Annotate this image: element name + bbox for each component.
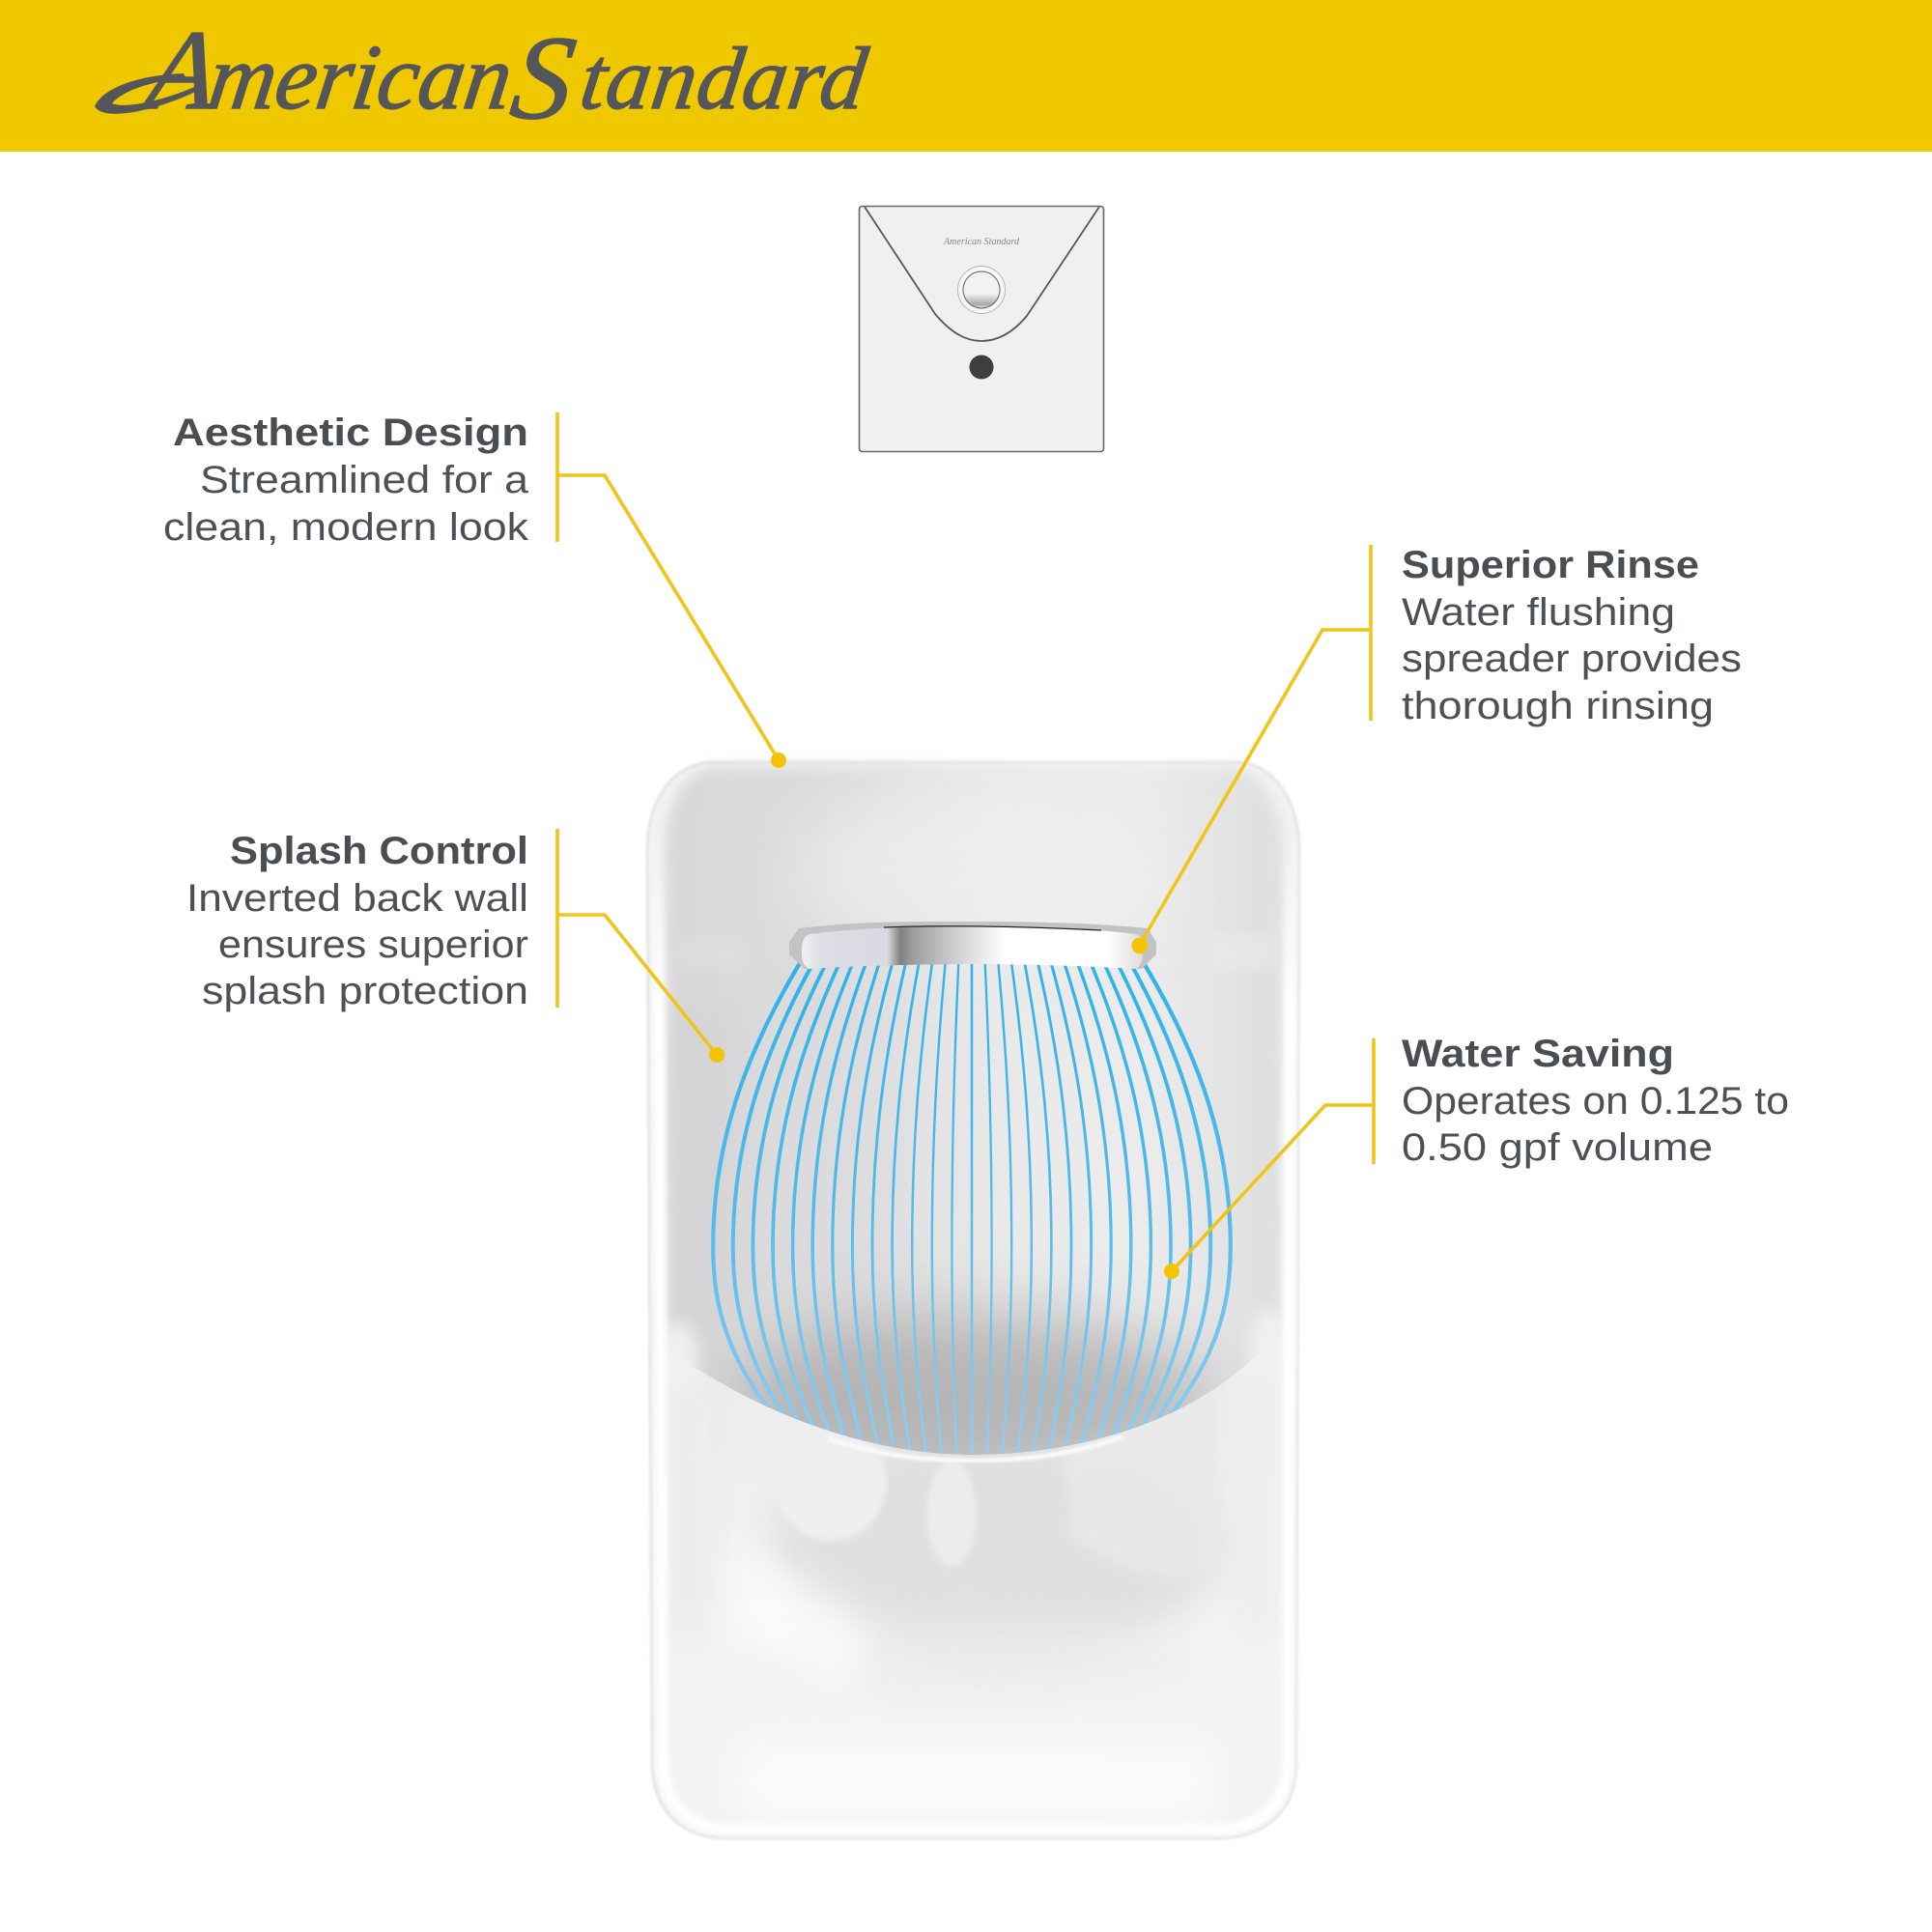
description (1402, 1080, 1789, 1169)
logo: American Standard: S (504, 12, 582, 144)
leader line (557, 412, 786, 768)
urinal body (647, 762, 1299, 1838)
callout: Aesthetic Design (163, 412, 786, 768)
lip highlight (831, 1437, 1121, 1461)
soft lower wall corners (659, 1310, 1289, 1392)
leader line (1164, 1038, 1374, 1279)
panel plate (860, 207, 1103, 452)
callout: Superior Rinse (1132, 544, 1742, 954)
description: splash protection (202, 970, 528, 1012)
flush button (958, 267, 1005, 313)
description: Operates on 0.125 to (1402, 1080, 1789, 1122)
description: 0.50 gpf volume (1402, 1126, 1713, 1169)
description: spreader provides (1402, 638, 1742, 680)
rim highlight (658, 831, 1291, 1830)
description: ensures superior (218, 923, 528, 966)
description (186, 877, 528, 1012)
heading: Superior Rinse (1402, 544, 1699, 586)
heading: Aesthetic Design (173, 412, 528, 454)
logo: American Standard: A (132, 7, 227, 133)
chrome spreader (789, 922, 1156, 969)
panel logo text: American Standard (943, 236, 1019, 247)
description: Water flushing (1402, 591, 1675, 634)
V-shaped cover seam (865, 207, 1099, 341)
sensor dot (970, 355, 993, 379)
lower bowl (668, 1360, 1280, 1656)
leader line (557, 829, 724, 1063)
callout: Water Saving (1164, 1033, 1789, 1279)
callout: Splash Control (186, 829, 724, 1063)
description: Streamlined for a (200, 459, 529, 501)
header band (0, 0, 1932, 152)
leader line (1132, 545, 1371, 954)
spreader water lines (713, 961, 1231, 1478)
heading: Splash Control (230, 830, 528, 872)
description (1402, 591, 1742, 727)
logo: American Standard: merican (203, 25, 541, 128)
description: thorough rinsing (1402, 685, 1714, 727)
description (163, 459, 529, 549)
logo: American Standard: tandard (575, 29, 873, 128)
description: Inverted back wall (186, 877, 528, 920)
urinal fixture (647, 762, 1299, 1838)
back wall (665, 767, 1283, 1488)
heading: Water Saving (1402, 1033, 1674, 1075)
description: clean, modern look (163, 506, 529, 549)
sensor flush panel (860, 207, 1103, 452)
logo: American Standard (95, 7, 877, 144)
